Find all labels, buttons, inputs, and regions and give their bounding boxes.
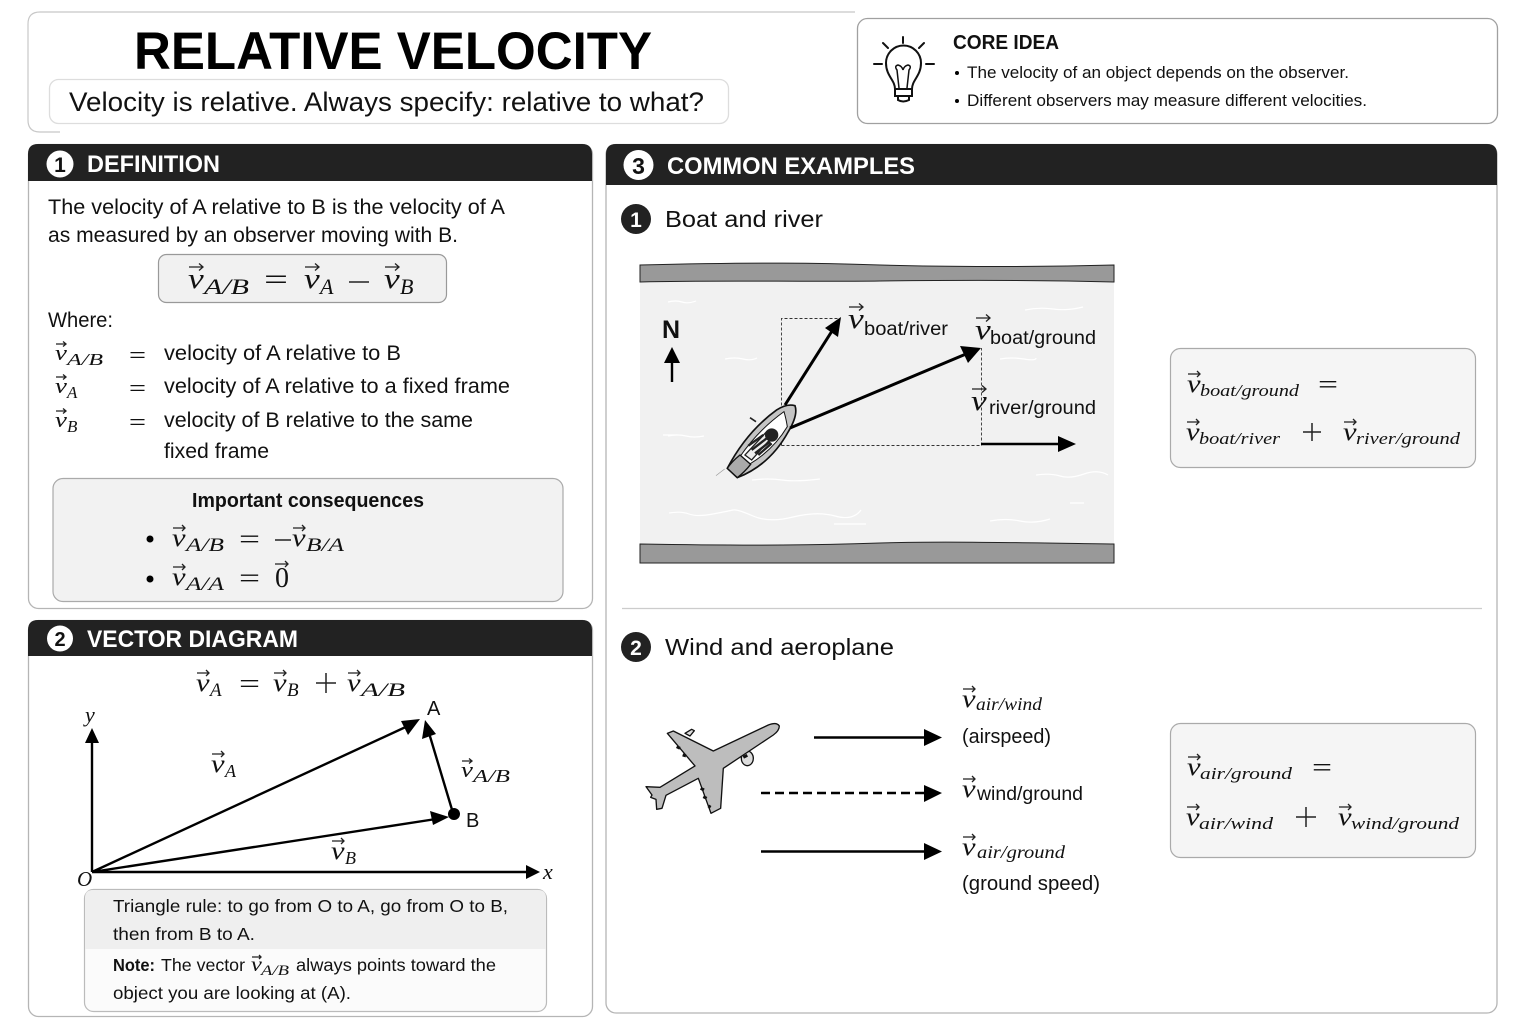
main formula [158, 254, 446, 302]
formula box: aeroplane: air/wind [1199, 814, 1274, 833]
vector equation: A [208, 680, 222, 701]
important consequences box [53, 478, 563, 602]
where list: A/B [66, 350, 104, 369]
triangle rule note: then from B to A. [113, 924, 255, 944]
arrow: air relative to ground [761, 843, 942, 860]
where list: = [129, 376, 146, 402]
important consequences box: = [239, 563, 260, 593]
label: air/ground ground speed: air/ground [977, 842, 1066, 862]
chart: vector triangle: O [77, 867, 92, 891]
important consequences box: B/A [306, 535, 345, 556]
label: boat/ground: boat/ground [990, 328, 1096, 349]
important consequences box: A/A [183, 574, 225, 595]
chart: vector triangle: B [466, 810, 479, 832]
important consequences box: = [239, 524, 260, 554]
label: air/ground ground speed: (ground speed) [962, 873, 1100, 895]
label: wind/ground: wind/ground [976, 784, 1083, 805]
formula box: aeroplane: v [1187, 753, 1201, 781]
main formula: v [304, 262, 320, 294]
compass north: N [662, 316, 680, 344]
formula box: boat: river/ground [1356, 429, 1461, 448]
label: river/ground [971, 384, 1096, 419]
vector equation [196, 669, 406, 701]
chart: vector triangle: x [542, 859, 553, 884]
label: river/ground: v [971, 384, 987, 416]
panel: core idea [858, 18, 1498, 124]
important consequences box: 0 [275, 563, 289, 594]
formula box: boat: = [1318, 370, 1338, 399]
triangle rule note: Triangle rule: to go from O to A, go from O to B, [113, 896, 508, 916]
label: boat/ground: v [975, 313, 991, 345]
triangle rule note: v [251, 953, 262, 975]
common examples header: 3 [632, 153, 645, 179]
heading: wind and aeroplane [621, 632, 894, 662]
formula box: boat: v [1343, 418, 1357, 446]
definition text [48, 196, 505, 247]
vector diagram header: VECTOR DIAGRAM [87, 626, 298, 653]
important consequences box: v [172, 563, 186, 591]
vector equation: B [287, 680, 299, 701]
definition header [28, 144, 592, 181]
arrow: river relative to ground [981, 436, 1076, 452]
chart: vector triangle: v [461, 758, 473, 782]
label: air/wind airspeed: (airspeed) [962, 726, 1051, 748]
definition header: 1 [54, 154, 66, 177]
icon: aeroplane [646, 724, 779, 813]
compass north [662, 316, 680, 382]
label: air/ground ground speed [962, 833, 1100, 895]
subtitle [50, 80, 728, 124]
heading: boat and river: Boat and river [665, 206, 823, 232]
core idea bullets [955, 64, 1367, 110]
where list: v [55, 341, 67, 365]
where list: fixed frame [164, 440, 269, 463]
arrow: air relative to wind [814, 729, 942, 746]
heading: boat and river [621, 204, 823, 234]
chart: vector triangle: v [331, 837, 345, 865]
heading: wind and aeroplane: Wind and aeroplane [665, 634, 894, 660]
chart: vector triangle: A/B [472, 766, 510, 786]
common examples header [606, 144, 1497, 185]
chart: vector triangle [77, 698, 553, 891]
title: RELATIVE VELOCITY [134, 22, 652, 81]
river water [640, 275, 1114, 555]
where list [55, 341, 510, 463]
vector equation: v [196, 669, 210, 697]
chart: vector triangle: A [427, 698, 441, 720]
panel: definition [28, 144, 592, 608]
chart: vector triangle: B [345, 848, 356, 868]
label: air/wind airspeed [962, 685, 1051, 748]
vector equation: A/B [358, 680, 406, 701]
formula box: aeroplane: air/ground [1200, 764, 1293, 783]
where list: v [55, 408, 67, 432]
panel: common examples [606, 144, 1497, 1013]
icon: boat [716, 405, 796, 478]
vector diagram header [28, 620, 592, 656]
where list: = [129, 410, 146, 436]
vector equation: = [239, 669, 260, 700]
arrow: wind relative to ground [761, 785, 942, 802]
formula box: aeroplane: v [1186, 803, 1200, 831]
label: boat/river: v [848, 302, 864, 334]
river banks [640, 263, 1114, 563]
label: air/wind airspeed: air/wind [976, 694, 1043, 714]
boat and river diagram [640, 263, 1114, 563]
core idea bullets: The velocity of an object depends on the observer. [967, 64, 1349, 82]
important consequences box: Important consequences [192, 490, 424, 512]
definition text: as measured by an observer moving with B. [48, 224, 458, 247]
formula box: aeroplane: = [1312, 753, 1332, 782]
common examples header: COMMON EXAMPLES [667, 153, 915, 180]
triangle rule note [84, 890, 546, 1012]
arrow: boat relative to ground [790, 346, 981, 428]
chart: vector triangle: A [224, 761, 237, 781]
vector equation: v [347, 669, 361, 697]
triangle rule note: The vector [161, 955, 245, 975]
label: air/ground ground speed: v [962, 833, 976, 861]
core idea heading: CORE IDEA [953, 32, 1059, 54]
label: wind/ground: v [962, 775, 976, 803]
where list: = [129, 343, 146, 369]
where list: B [67, 417, 78, 436]
label: boat/river [848, 302, 949, 340]
important consequences box: A/B [183, 535, 225, 556]
main formula: v [188, 262, 204, 294]
subtitle: Velocity is relative. Always specify: relative to what? [69, 87, 704, 117]
label: boat/ground [975, 313, 1096, 349]
core idea bullets: Different observers may measure different velocities. [967, 92, 1367, 110]
chart: vector triangle: y [83, 702, 95, 727]
where list: A [66, 383, 78, 402]
main formula: A/B [201, 274, 249, 299]
where label: Where: [48, 309, 113, 332]
label: river/ground: river/ground [989, 398, 1096, 419]
triangle rule note: always points toward the [296, 955, 496, 975]
formula box: boat: v [1186, 418, 1200, 446]
main formula: A [318, 274, 334, 299]
formula box: boat: v [1187, 370, 1201, 398]
where list: velocity of B relative to the same [164, 409, 473, 432]
formula box: aeroplane: wind/ground [1351, 814, 1460, 833]
label: wind/ground [962, 775, 1083, 805]
heading: boat and river: 1 [630, 209, 642, 232]
important consequences box: v [172, 524, 186, 552]
triangle rule note: object you are looking at (A). [113, 983, 351, 1003]
main formula: v [384, 262, 400, 294]
panel: vector diagram [28, 620, 592, 1016]
vector diagram header: 2 [54, 629, 66, 651]
definition header: DEFINITION [87, 151, 220, 178]
triangle rule note: A/B [260, 963, 289, 979]
main formula: B [400, 274, 413, 299]
important consequences box: v [292, 524, 306, 552]
icon: light bulb [874, 37, 934, 102]
label: air/wind airspeed: v [962, 685, 976, 713]
where list: velocity of A relative to B [164, 342, 401, 365]
triangle rule note: Note: [113, 955, 155, 975]
formula box: aeroplane [1170, 724, 1476, 858]
formula box: boat: boat/river [1199, 429, 1280, 448]
vector equation: v [273, 669, 287, 697]
title panel [28, 12, 855, 132]
formula box: aeroplane: v [1338, 803, 1352, 831]
formula box: boat [1170, 348, 1476, 468]
component dashes [782, 318, 982, 446]
definition text: The velocity of A relative to B is the velocity of A [48, 196, 505, 219]
heading: wind and aeroplane: 2 [630, 637, 642, 660]
chart: vector triangle: v [211, 750, 225, 778]
main formula: = [264, 263, 288, 296]
where list: v [55, 374, 67, 398]
label: boat/river: boat/river [864, 319, 949, 340]
arrow: boat relative to river [785, 317, 841, 405]
where list: velocity of A relative to a fixed frame [164, 375, 510, 398]
formula box: boat: boat/ground [1200, 381, 1300, 400]
